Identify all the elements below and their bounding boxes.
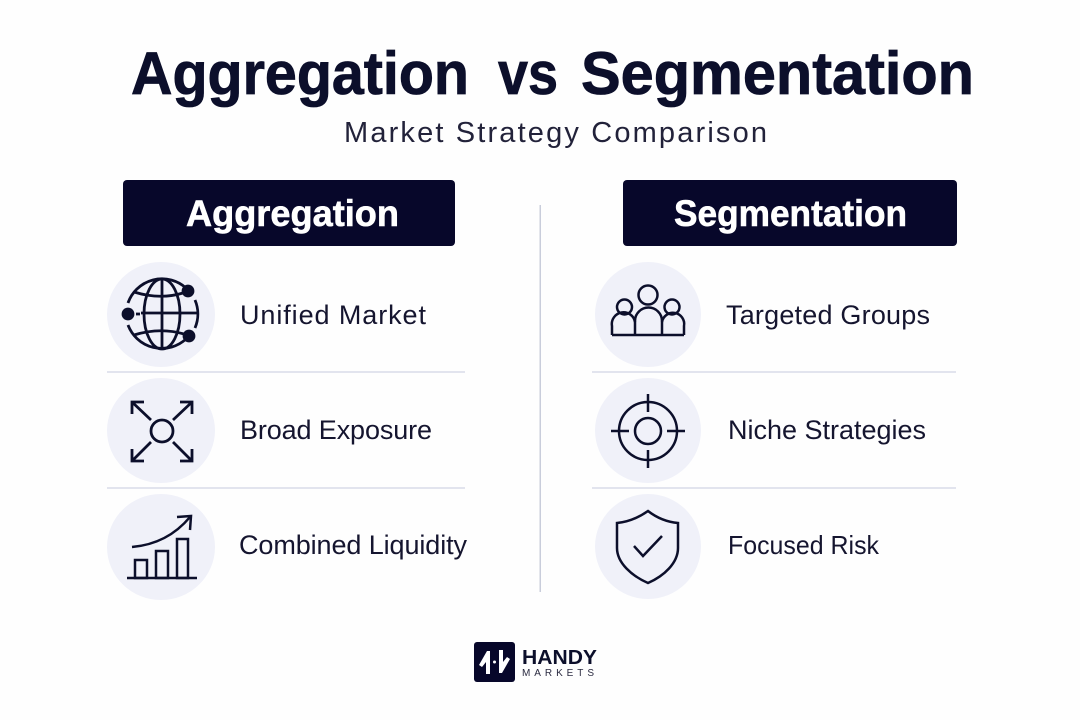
label: focused risk: Focused Risk <box>728 530 880 560</box>
icon: target <box>611 394 685 468</box>
heading: segmentation: Segmentation <box>674 193 907 234</box>
subtitle: Market Strategy Comparison <box>344 117 767 149</box>
item: unified market <box>107 262 426 367</box>
label: combined liquidity: Combined Liquidity <box>239 530 468 560</box>
label: unified market: Unified Market <box>240 300 426 330</box>
icon: people <box>612 286 684 335</box>
item: targeted groups <box>595 262 930 367</box>
label: broad exposure: Broad Exposure <box>240 415 432 445</box>
panel: segmentation <box>592 180 957 599</box>
icon: expand arrows <box>132 402 192 461</box>
item: combined liquidity <box>107 494 468 600</box>
wordmark: HANDY <box>522 647 598 669</box>
panel: aggregation <box>107 180 468 600</box>
label: niche strategies: Niche Strategies <box>728 415 926 445</box>
heading: segmentation <box>623 180 957 246</box>
title: Segmentation <box>581 40 974 107</box>
icon: globe <box>123 278 198 349</box>
item: niche strategies <box>595 378 926 483</box>
logo: handy markets: MARKETS <box>522 668 594 679</box>
icon: growth chart <box>127 516 197 578</box>
title <box>131 40 974 107</box>
center divider <box>540 205 541 592</box>
item: broad exposure <box>107 378 432 483</box>
heading: aggregation: Aggregation <box>186 193 399 234</box>
label: targeted groups: Targeted Groups <box>726 300 930 330</box>
icon: shield check <box>617 511 678 583</box>
heading: aggregation <box>123 180 455 246</box>
title: Aggregation <box>131 40 469 107</box>
logo: handy markets <box>474 642 598 682</box>
title: vs <box>498 40 558 107</box>
icon: logo mark <box>474 642 515 682</box>
item: focused risk <box>595 494 880 599</box>
